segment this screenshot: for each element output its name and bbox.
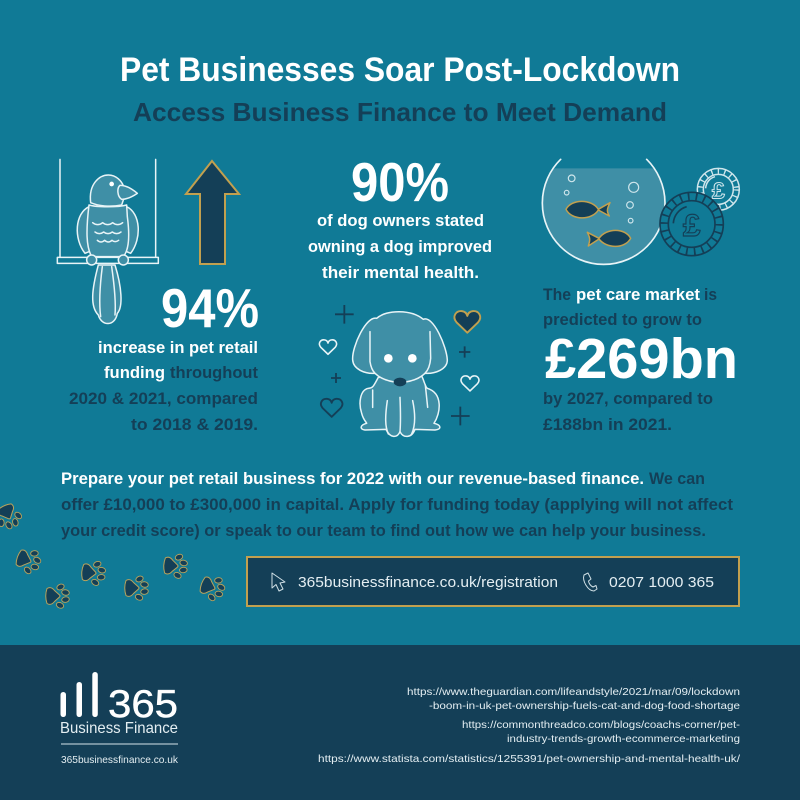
stat: £269bn: £269bn [545, 327, 738, 391]
text: call to action paragraph [61, 469, 733, 540]
subtitle: Access Business Finance to Meet Demand [133, 97, 667, 127]
text: call to action paragraph: We can [649, 469, 705, 488]
contact bar: 365businessfinance.co.uk/registration [298, 574, 558, 591]
text: retail funding: 2020 & 2021, compared [69, 389, 258, 408]
footer band [0, 645, 800, 800]
icon: dog with hearts [319, 305, 480, 436]
text: retail funding: throughout [170, 363, 258, 382]
title: Pet Businesses Soar Post-Lockdown [120, 51, 680, 89]
icon: fish bowl and coins [542, 159, 739, 264]
logo: 365businessfinance.co.uk [61, 754, 179, 766]
text: call to action paragraph: offer £10,000 to £300,000 in capital. Apply for funding today (applying will not affect [61, 495, 733, 514]
source links: https://commonthreadco.com/blogs/coachs-corner/pet- [462, 719, 741, 731]
text: retail funding: increase in pet retail [98, 338, 258, 357]
icon: paw prints [0, 500, 228, 609]
text: call to action paragraph: your credit score) or speak to our team to find out how we can help your business. [61, 521, 706, 540]
stat: 90%: 90% [351, 151, 449, 213]
text: market comparison: by 2027, compared to [543, 389, 713, 408]
source links: industry-trends-growth-ecommerce-marketing [507, 733, 740, 745]
source links: https://www.theguardian.com/lifeandstyle/2021/mar/09/lockdown [407, 686, 740, 698]
text: retail funding: funding [104, 363, 165, 382]
logo [60, 672, 179, 766]
logo: 365 [108, 683, 178, 726]
text: call to action paragraph: Prepare your pet retail business for 2022 with our revenue-based finance. [61, 469, 644, 488]
text: pet care market [543, 285, 717, 329]
text: dog owners [308, 211, 492, 282]
icon: phone [584, 573, 597, 591]
text: retail funding [69, 338, 258, 434]
stat: 94%: 94% [161, 277, 259, 339]
text: pet care market: predicted to grow to [543, 310, 702, 329]
contact bar: 0207 1000 365 [609, 574, 714, 591]
icon: fish bowl and coins: £ [712, 178, 725, 204]
text: pet care market: The [543, 285, 571, 304]
source links: -boom-in-uk-pet-ownership-fuels-cat-and-dog-food-shortage [429, 700, 740, 712]
text: market comparison: £188bn in 2021. [543, 415, 672, 434]
icon: fish bowl and coins: £ [683, 207, 701, 243]
text: dog owners: owning a dog improved [308, 237, 492, 256]
logo: Business Finance [60, 720, 178, 737]
icon: cursor [272, 573, 285, 591]
text: pet care market: pet care market [576, 285, 700, 304]
text: pet care market: is [704, 285, 717, 304]
contact bar [247, 557, 739, 606]
source links [318, 686, 741, 765]
source links: https://www.statista.com/statistics/1255391/pet-ownership-and-mental-health-uk/ [318, 753, 740, 765]
text: market comparison [543, 389, 713, 434]
icon: parrot on swing [57, 159, 158, 324]
icon: up arrow [186, 161, 239, 264]
text: retail funding: to 2018 & 2019. [131, 415, 258, 434]
text: dog owners: of dog owners stated [317, 211, 484, 230]
text: dog owners: their mental health. [322, 263, 479, 282]
